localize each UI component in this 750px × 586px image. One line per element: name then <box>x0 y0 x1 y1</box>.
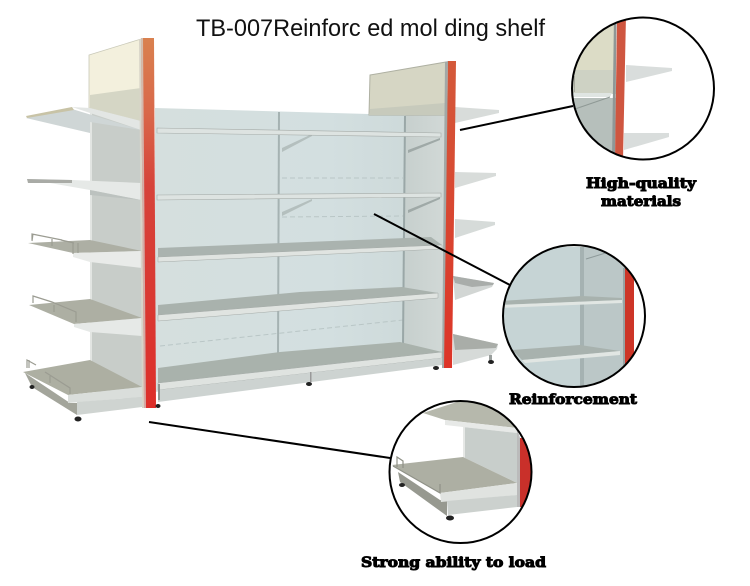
title: TB-007Reinforc ed mol ding shelf <box>196 15 545 42</box>
right red upright post <box>433 61 456 370</box>
left shelves <box>23 107 142 422</box>
center back wall <box>155 108 445 392</box>
callout circle: high-quality materials <box>570 15 714 160</box>
upper right header panel <box>369 62 446 115</box>
callout circle: reinforcement <box>500 240 648 390</box>
left side bay panel <box>90 110 143 404</box>
wall seams <box>160 178 403 346</box>
label: reinforcement: Reinforcement <box>509 392 638 408</box>
label: strong ability to load: Strong ability to load <box>361 555 546 571</box>
right side bay panel <box>278 112 447 355</box>
label: high-quality materials: materials <box>601 194 681 210</box>
label: high-quality materials: High-quality <box>586 176 697 192</box>
label: high-quality materials <box>586 176 697 210</box>
left red upright post <box>139 38 160 408</box>
center shelves <box>157 128 442 402</box>
upper left header panel <box>89 39 141 121</box>
leader lines <box>149 106 573 458</box>
shelf unit illustration <box>23 38 499 422</box>
right outward shelves <box>453 107 499 365</box>
callout circle: strong ability to load <box>390 400 535 543</box>
center foot <box>306 382 312 386</box>
